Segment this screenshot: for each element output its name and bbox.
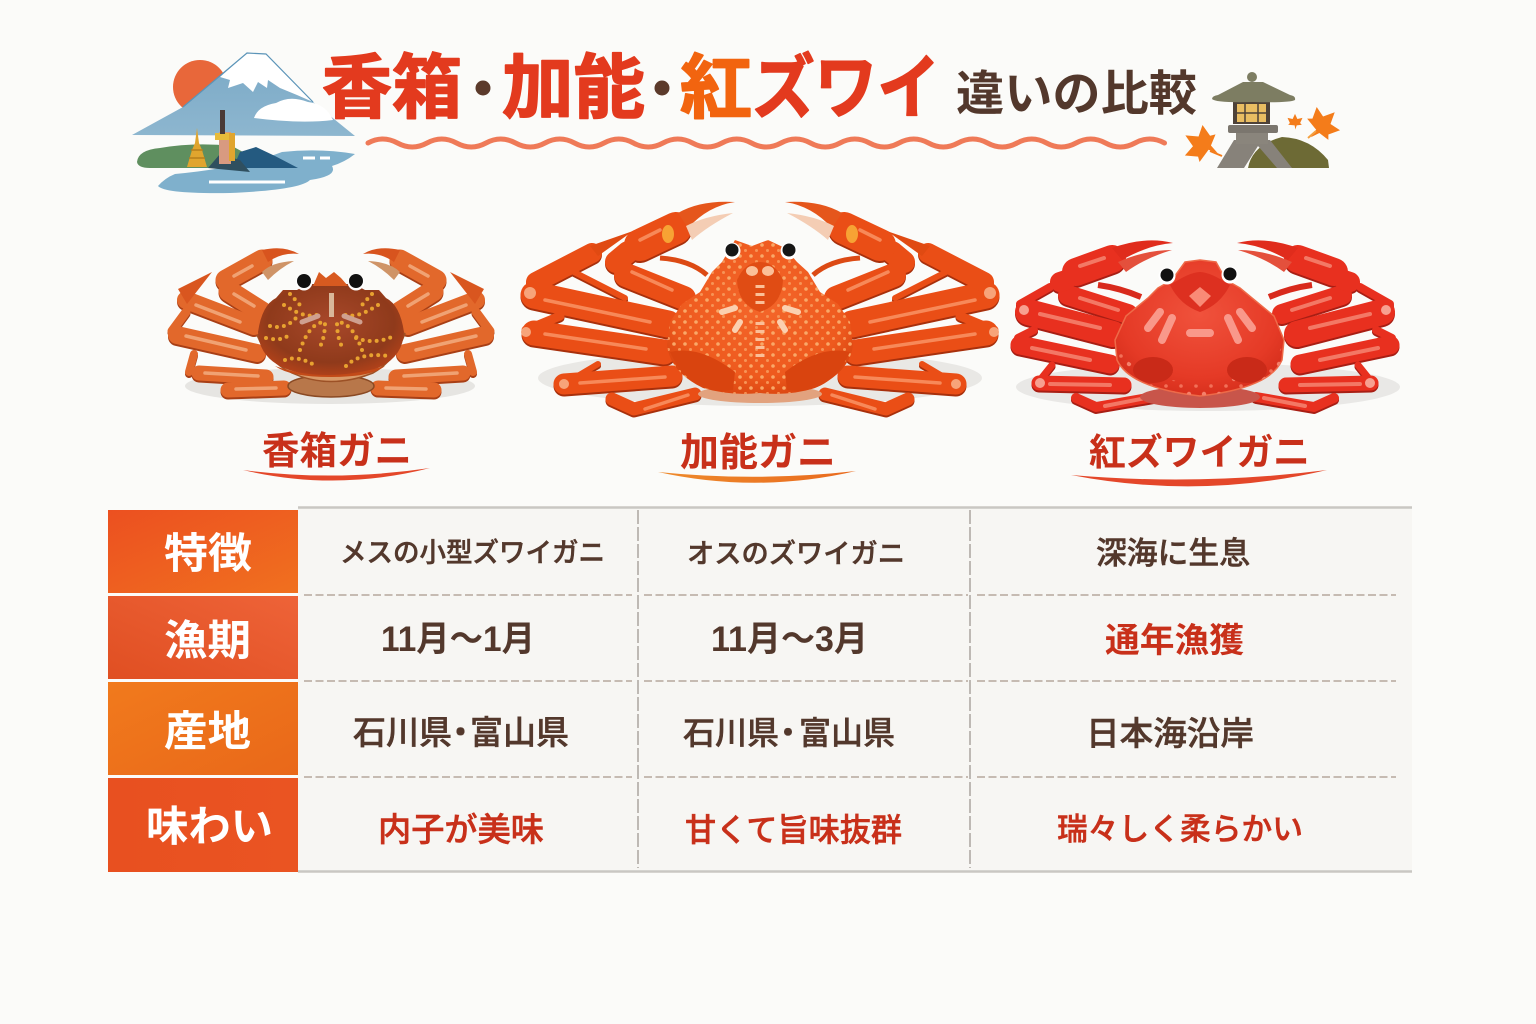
row header: 味わい: 味わい bbox=[146, 803, 273, 850]
title bbox=[322, 49, 1197, 127]
row text: 特徴: メスの小型ズワイガニ bbox=[340, 538, 605, 568]
crab name: 香箱ガニ bbox=[243, 431, 430, 481]
row text: 漁期: 11月～3月 bbox=[711, 620, 868, 659]
row text: 味わい: 甘くて旨味抜群 bbox=[685, 812, 902, 848]
row text: 漁期 bbox=[381, 620, 1244, 660]
row header: 産地 bbox=[108, 682, 298, 775]
row text: 産地: 石川県 bbox=[353, 714, 452, 751]
title: 香箱 bbox=[322, 49, 462, 127]
row text: 産地: 石川県 bbox=[683, 715, 779, 751]
crab name: 紅ズワイガニ: 紅ズワイガニ bbox=[1089, 432, 1310, 473]
row header: 漁期 bbox=[108, 596, 298, 679]
crab illustration: 加能ガニ bbox=[521, 202, 999, 411]
row text: 産地: 日本海沿岸 bbox=[1086, 715, 1254, 752]
row text: 産地: ・ bbox=[772, 715, 804, 751]
crab name: 紅ズワイガニ bbox=[1071, 432, 1327, 486]
row text: 産地: ・ bbox=[444, 714, 477, 751]
row header: 特徴: 特徴 bbox=[164, 530, 252, 577]
title: ズワイ bbox=[752, 49, 940, 127]
row text: 産地 bbox=[353, 714, 1254, 752]
illustration: Mount Fuji and lake scene bbox=[132, 53, 355, 193]
row text: 味わい bbox=[378, 811, 1303, 848]
row text: 漁期: 11月～1月 bbox=[381, 620, 535, 659]
row text: 味わい: 瑞々しく柔らかい bbox=[1057, 812, 1303, 847]
comparison table bbox=[108, 507, 1412, 872]
row text: 特徴 bbox=[340, 536, 1250, 571]
title: 紅 bbox=[680, 49, 752, 127]
illustration: stone lantern and autumn leaves bbox=[1177, 72, 1346, 169]
row header: 味わい bbox=[108, 778, 298, 872]
row text: 産地: 富山県 bbox=[799, 715, 895, 751]
row header: 特徴 bbox=[108, 510, 298, 593]
row text: 特徴: 深海に生息 bbox=[1096, 536, 1250, 571]
row text: 漁期: 通年漁獲 bbox=[1105, 622, 1244, 660]
crab name: 香箱ガニ: 香箱ガニ bbox=[262, 431, 412, 473]
title: 加能 bbox=[502, 49, 645, 127]
row text: 特徴: オスのズワイガニ bbox=[687, 539, 905, 569]
crab illustration: 香箱ガニ bbox=[172, 248, 490, 404]
crab illustration: 紅ズワイガニ bbox=[1016, 240, 1400, 411]
row text: 味わい: 内子が美味 bbox=[378, 811, 544, 848]
crab name: 加能ガニ bbox=[658, 432, 856, 483]
crab name: 加能ガニ: 加能ガニ bbox=[680, 432, 836, 475]
row text: 産地: 富山県 bbox=[470, 714, 569, 751]
wavy title underline bbox=[368, 139, 1164, 147]
row header: 漁期: 漁期 bbox=[164, 617, 251, 664]
title: 違いの比較 bbox=[956, 68, 1197, 121]
row header: 産地: 産地 bbox=[164, 708, 251, 755]
